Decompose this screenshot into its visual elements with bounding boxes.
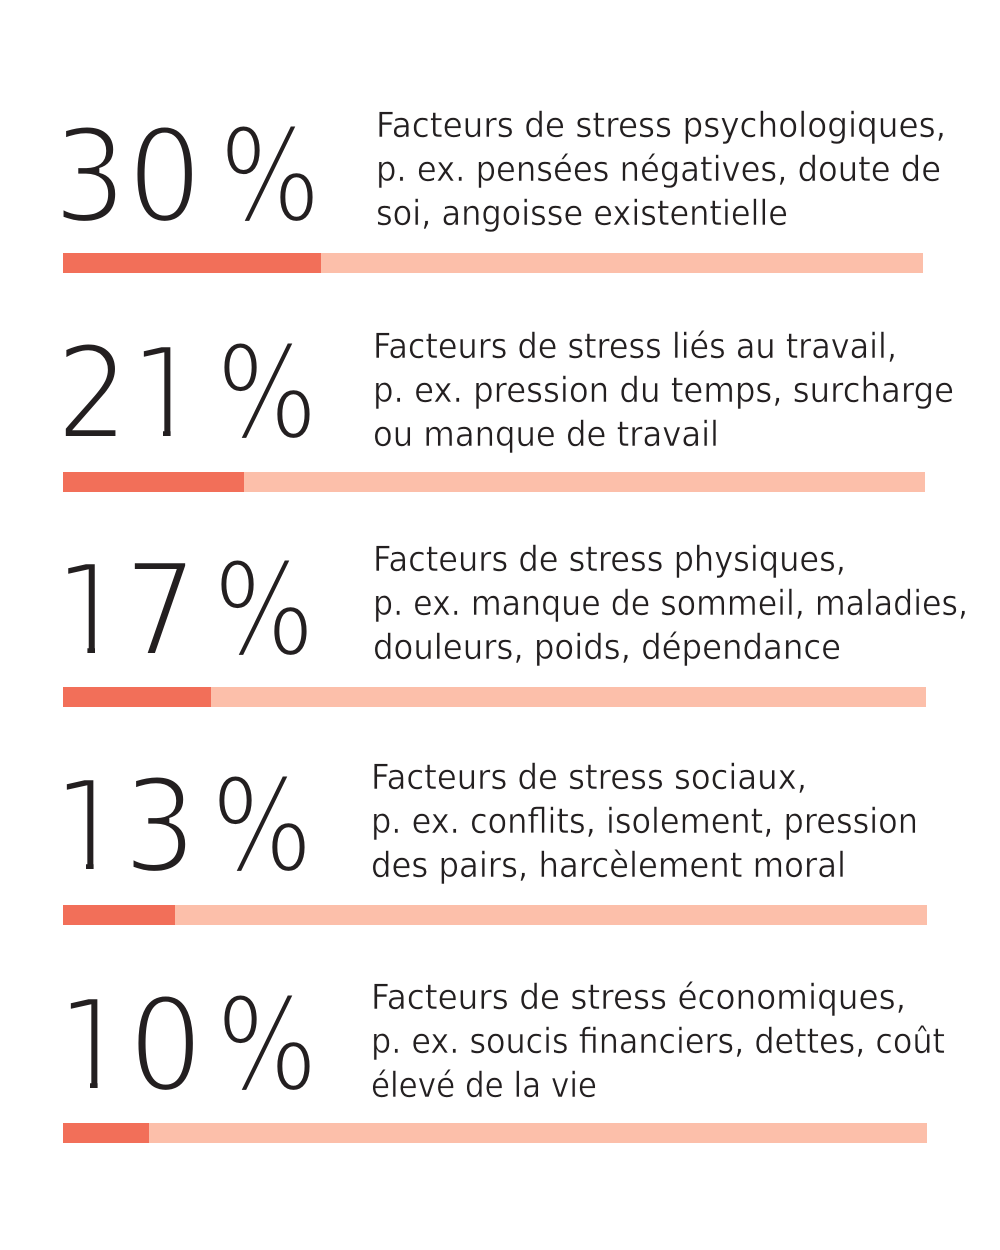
percentage: 13 %: 3 [122, 750, 197, 902]
progress bar: 30% [63, 253, 923, 273]
percentage: 17 % [53, 534, 314, 687]
description: psychological stressors: p. ex. pensées négatives, doute de [376, 150, 941, 190]
progress bar: 13% [63, 905, 927, 925]
description: economic stressors: Facteurs de stress économiques, [371, 978, 906, 1018]
percentage: 10 %: % [217, 969, 317, 1121]
percentage: 21 %: 2 [55, 318, 129, 470]
panel: economic stressors 10% [55, 969, 945, 1143]
progress bar: 10% [63, 1123, 927, 1143]
panel: physical stressors 17% [53, 534, 968, 707]
description: social stressors: des pairs, harcèlement moral [371, 846, 846, 886]
description: work stressors: ou manque de travail [373, 415, 719, 455]
progress bar: 21% [63, 472, 925, 492]
description: psychological stressors: Facteurs de stress psychologiques, [376, 106, 946, 146]
percentage: 13 % [51, 750, 312, 903]
description: physical stressors [373, 540, 968, 668]
percentage: 21 %: 1 [128, 318, 203, 470]
description: social stressors [371, 758, 918, 886]
percentage: 17 %: % [214, 534, 314, 686]
description: social stressors: p. ex. conflits, isolement, pression [371, 802, 918, 842]
description: physical stressors: Facteurs de stress physiques, [373, 540, 846, 580]
description: economic stressors: p. ex. soucis financiers, dettes, coût [371, 1022, 945, 1062]
percentage: 30 %: 0 [128, 100, 202, 252]
progress bar: 17% [63, 687, 926, 707]
description: social stressors: Facteurs de stress sociaux, [371, 758, 807, 798]
percentage: 10 % [55, 969, 317, 1122]
description: psychological stressors [376, 106, 946, 234]
description: work stressors: Facteurs de stress liés au travail, [373, 327, 897, 367]
description: physical stressors: douleurs, poids, dépendance [373, 628, 841, 668]
description: economic stressors [371, 978, 945, 1106]
percentage: 21 % [55, 317, 317, 470]
percentage: 30 %: % [220, 100, 320, 252]
percentage: 13 %: 1 [51, 751, 126, 903]
description: work stressors: p. ex. pression du temps, surcharge [373, 371, 954, 411]
percentage: 17 %: 7 [123, 534, 197, 686]
percentage: 17 %: 1 [53, 535, 127, 687]
panel: work stressors 21% [55, 317, 954, 492]
panel: psychological stressors 30% [52, 100, 946, 273]
percentage: 30 %: 3 [52, 100, 127, 252]
description: work stressors [373, 327, 954, 455]
percentage: 30 % [52, 100, 320, 252]
percentage: 21 %: % [217, 317, 317, 469]
percentage: 10 %: 0 [128, 970, 203, 1122]
percentage: 10 %: 1 [55, 970, 130, 1122]
percentage: 13 %: % [212, 750, 312, 902]
description: economic stressors: élevé de la vie [371, 1066, 597, 1106]
panel: social stressors 13% [51, 750, 927, 925]
description: psychological stressors: soi, angoisse existentielle [376, 194, 788, 234]
